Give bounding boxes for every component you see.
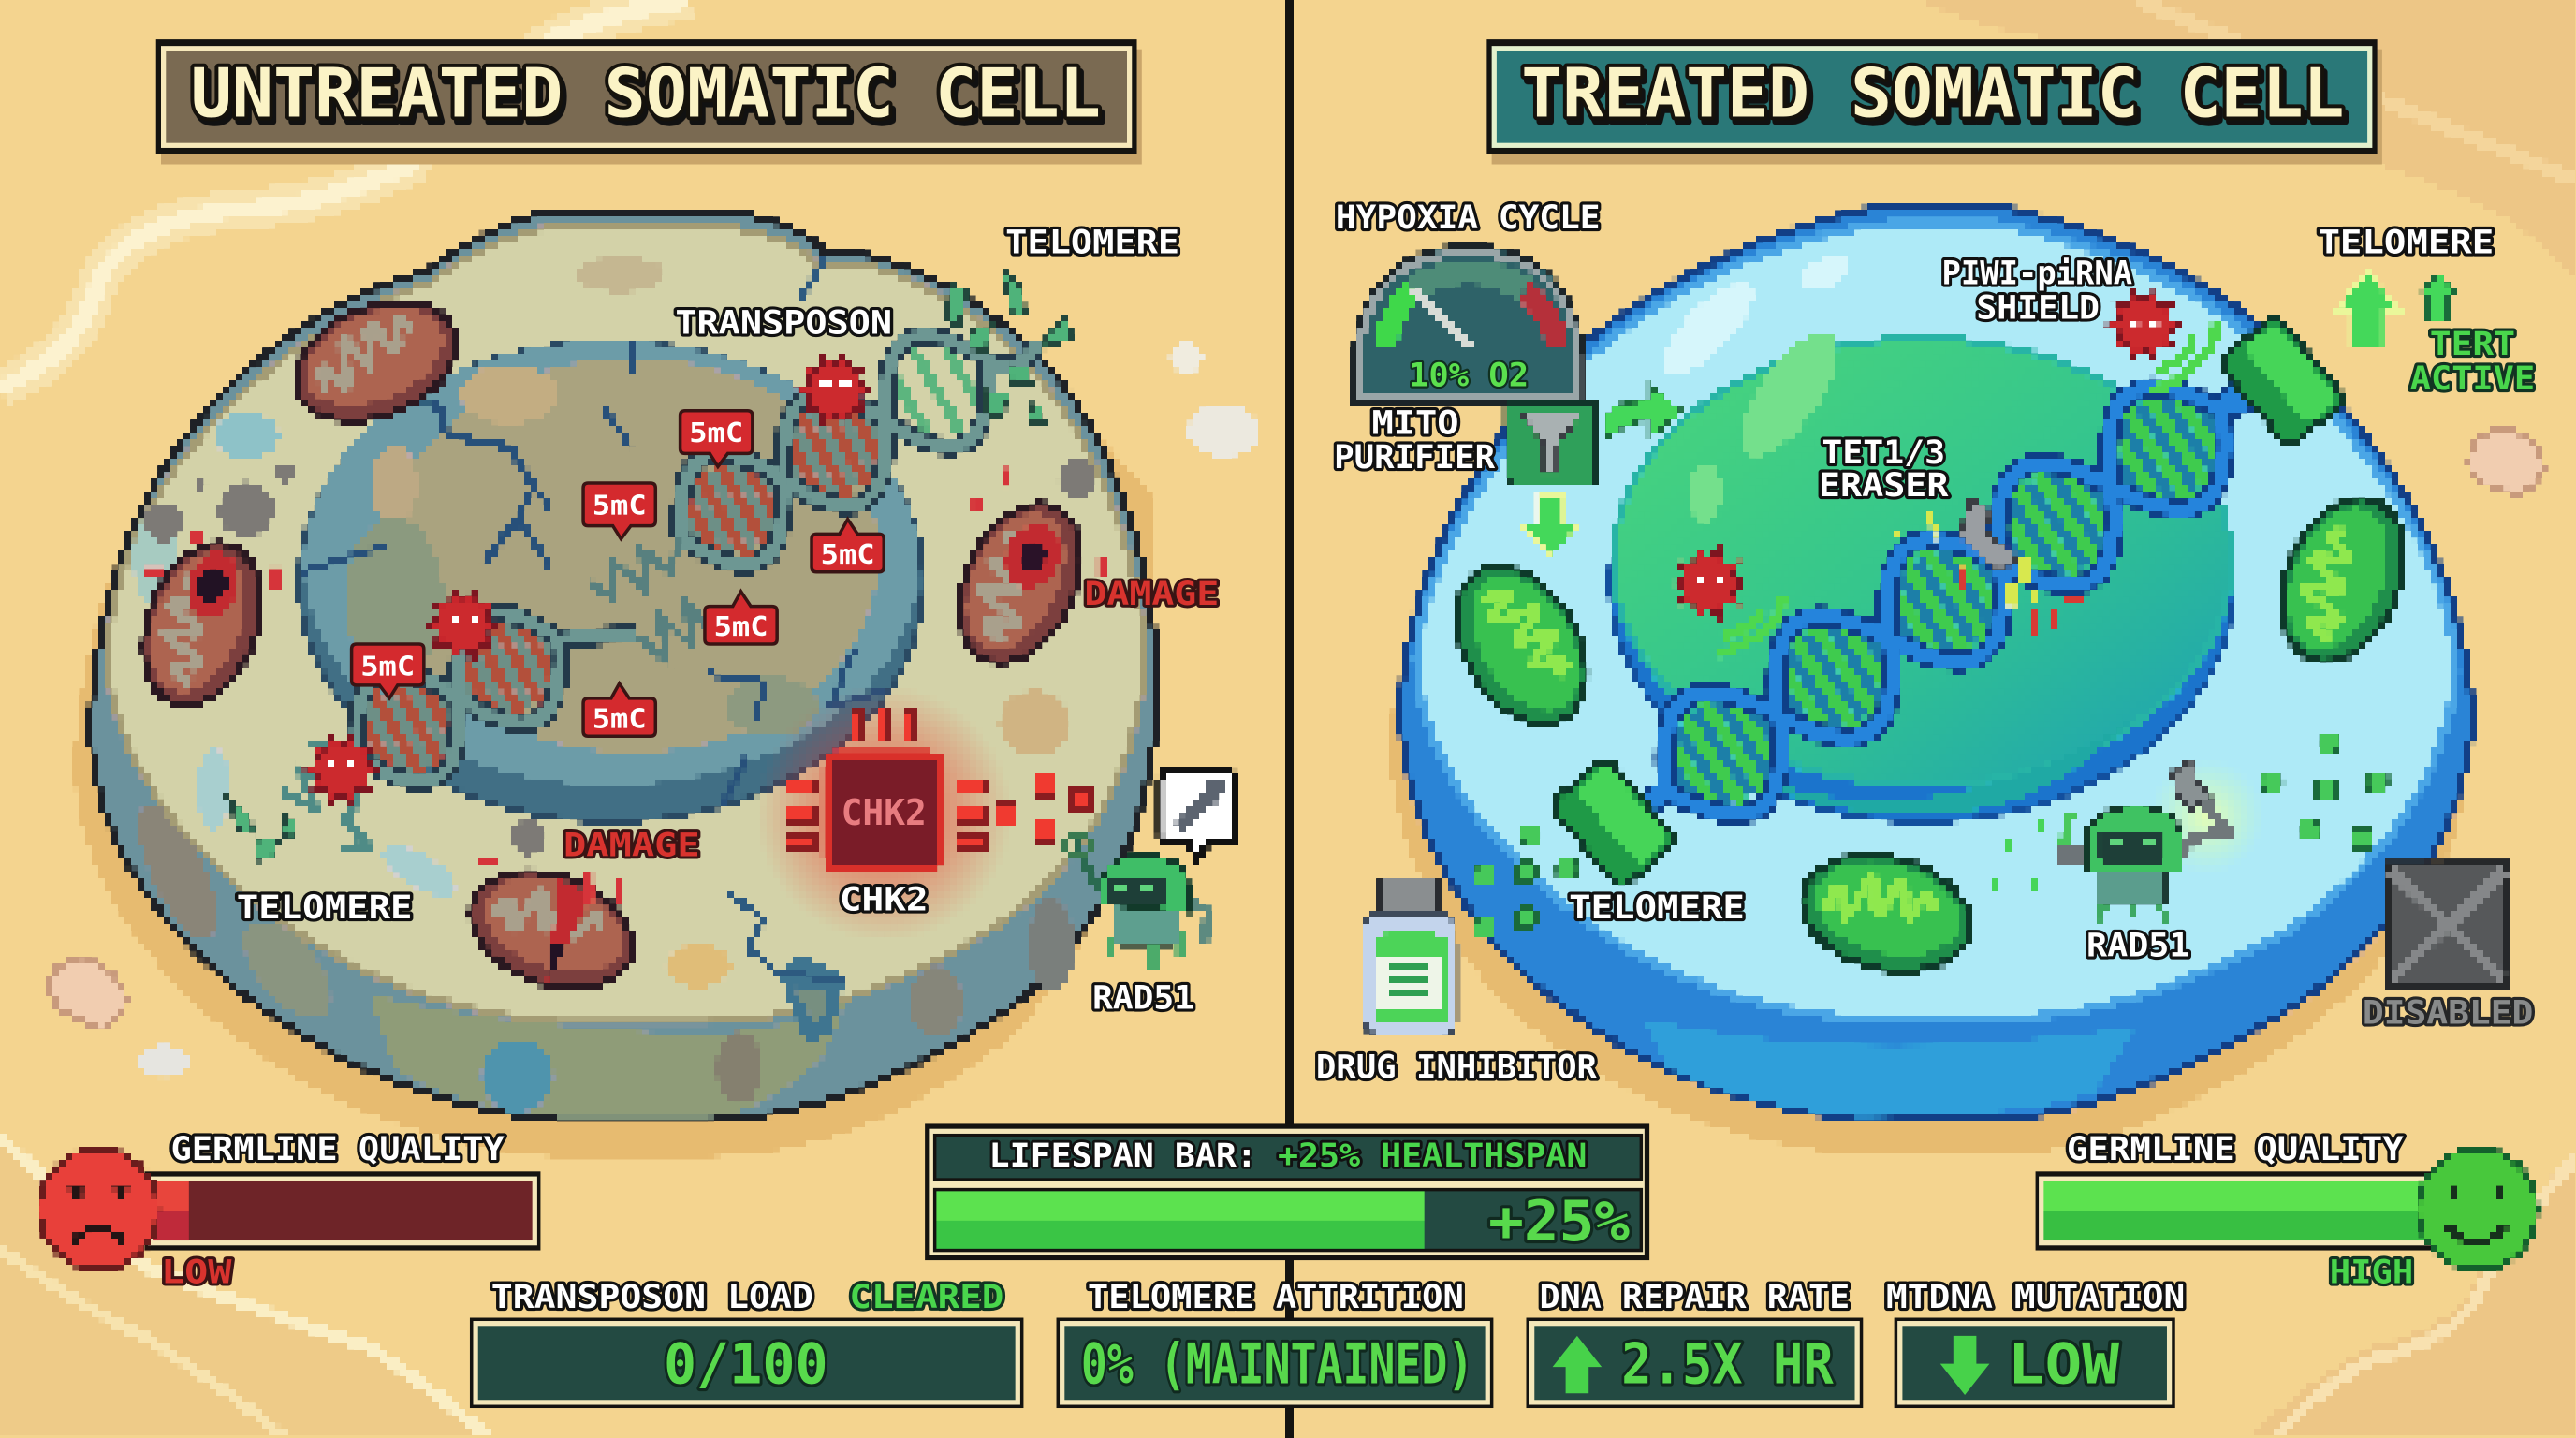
stat: DNA repair rate: 2.5X HR bbox=[1621, 1333, 1834, 1398]
5mC methylation tags: 5mC bbox=[593, 703, 647, 734]
cell shadow on sand bbox=[1388, 246, 2466, 1155]
label: TERT active: ACTIVE bbox=[2410, 360, 2535, 398]
label: hypoxia cycle: HYPOXIA CYCLE bbox=[1336, 198, 1600, 237]
lifespan heading: LIFESPAN BAR: +25% HEALTHSPAN bbox=[989, 1137, 1587, 1175]
shell bbox=[2469, 429, 2543, 496]
cell membrane cracks bbox=[726, 257, 846, 979]
label: telomere top: TELOMERE bbox=[1005, 223, 1179, 261]
label: telomere bottom: TELOMERE bbox=[1569, 888, 1745, 927]
lifespan bar bbox=[925, 1123, 1649, 1260]
label: mito purifier: PURIFIER bbox=[1334, 438, 1496, 477]
DNA double helix bbox=[1565, 321, 2309, 890]
telomere fragments bbox=[227, 271, 1071, 861]
mitochondrion right bbox=[2259, 480, 2426, 680]
stat: telomere attrition: TELOMERE ATTRITION bbox=[1088, 1278, 1464, 1316]
label: transposon: TRANSPOSON bbox=[675, 303, 892, 342]
telomerase particles bbox=[1475, 733, 2387, 938]
icon: telomere up arrows bbox=[2334, 271, 2458, 348]
cell top surface bbox=[107, 225, 1145, 1022]
germline quality untreated bbox=[39, 1130, 540, 1292]
label: CHK2: CHK2 bbox=[840, 880, 929, 918]
lifespan value: +25% bbox=[1488, 1190, 1630, 1255]
gauge reading: 10% O2 bbox=[1409, 356, 1529, 394]
5mC methylation tags: 5mC bbox=[821, 539, 875, 570]
label: telomere bottom: TELOMERE bbox=[237, 888, 413, 927]
stat: transposon load: CLEARED bbox=[849, 1278, 1003, 1316]
panel: untreated cell bbox=[50, 211, 1260, 1157]
telomere cap bottom bbox=[1548, 756, 1678, 890]
CHK2 chip text: CHK2 bbox=[842, 792, 927, 834]
cell body bbox=[1399, 205, 2472, 1119]
stat: DNA repair rate: DNA REPAIR RATE bbox=[1540, 1278, 1850, 1316]
bar bbox=[144, 1171, 540, 1251]
cell side patches bbox=[123, 793, 1075, 1117]
label: RAD51: RAD51 bbox=[1092, 979, 1194, 1018]
DNA fragment lower bbox=[256, 519, 720, 868]
neutralised viruses with shields bbox=[1673, 291, 2217, 653]
stat: transposon load: TRANSPOSON LOAD bbox=[491, 1278, 813, 1316]
label: damage right: DAMAGE bbox=[1084, 575, 1219, 613]
smoke and sparks bbox=[144, 460, 1105, 903]
label: PIWI-piRNA shield bbox=[1942, 255, 2132, 327]
centre divider bbox=[1285, 0, 1294, 1438]
nucleus bbox=[1610, 318, 2234, 822]
label: GERMLINE QUALITY bbox=[2067, 1130, 2404, 1168]
5mC methylation tags: 5mC bbox=[689, 418, 743, 448]
label: RAD51: RAD51 bbox=[2086, 926, 2190, 964]
stat: mtDNA mutation: LOW bbox=[2008, 1333, 2119, 1398]
label: GERMLINE QUALITY bbox=[171, 1130, 505, 1168]
label: mito purifier bbox=[1334, 404, 1496, 477]
label: TET1/3 eraser bbox=[1819, 433, 1949, 505]
label: TERT active bbox=[2410, 325, 2535, 398]
cell shadow on sand bbox=[74, 250, 1153, 1157]
panel: treated cell bbox=[1316, 198, 2543, 1155]
title: untreated: UNTREATED SOMATIC CELL bbox=[191, 54, 1101, 133]
label: PIWI-piRNA shield: SHIELD bbox=[1976, 288, 2100, 327]
gauge: hypoxia cycle bbox=[1354, 246, 1584, 403]
icon: sad face bbox=[39, 1149, 157, 1270]
title: treated bbox=[1486, 39, 2382, 165]
RAD51 robot active bbox=[1995, 759, 2264, 920]
germline quality treated bbox=[2036, 1130, 2537, 1292]
disabled CHK2 crate bbox=[2387, 864, 2509, 986]
stat: transposon load bbox=[470, 1278, 1023, 1408]
drug inhibitor bottle bbox=[1364, 877, 1456, 1035]
title: treated: TREATED SOMATIC CELL bbox=[1521, 54, 2345, 133]
CHK2 chip bbox=[755, 685, 1090, 942]
label: TERT active: TERT bbox=[2430, 325, 2515, 363]
bar bbox=[2036, 1171, 2438, 1251]
5mC methylation tags bbox=[352, 411, 884, 736]
mitochondrion healthy-ish bbox=[278, 280, 475, 443]
RAD51 robot weak bbox=[1066, 833, 1208, 973]
arrow: purifier to nucleus bbox=[1606, 385, 1682, 439]
5mC methylation tags: 5mC bbox=[593, 490, 647, 521]
mitochondrion damaged left bbox=[123, 527, 282, 722]
cell top surface bbox=[1416, 224, 2456, 1019]
stat: transposon load: 0/100 bbox=[664, 1333, 828, 1398]
mitochondrion left bbox=[1430, 544, 1613, 748]
label: damage bottom: DAMAGE bbox=[564, 826, 700, 864]
arrow: purifier down bbox=[1521, 494, 1579, 557]
label: telomere top: TELOMERE bbox=[2318, 223, 2494, 261]
stat: mtDNA mutation: MTDNA MUTATION bbox=[1886, 1278, 2185, 1316]
label: PIWI-piRNA shield: PIWI-piRNA bbox=[1942, 255, 2132, 293]
label: TET1/3 eraser: TET1/3 bbox=[1822, 433, 1945, 472]
cell lower front face bbox=[1643, 1019, 2136, 1117]
nuclear cracks bbox=[299, 342, 887, 805]
label: mito purifier: MITO bbox=[1372, 404, 1459, 442]
icon: happy face bbox=[2419, 1149, 2537, 1270]
icon: transposon viruses bbox=[305, 355, 871, 803]
stat: telomere attrition bbox=[1057, 1278, 1493, 1408]
TET1/3 eraser tool bbox=[1895, 496, 2083, 634]
speech bubble wrench bbox=[1160, 770, 1236, 861]
icon: mito purifier filter bbox=[1506, 403, 1597, 485]
5mC methylation tags: 5mC bbox=[714, 611, 768, 642]
mitochondrion bottom bbox=[1790, 839, 1983, 989]
telomere cap top bbox=[2217, 315, 2347, 448]
label: disabled: DISABLED bbox=[2363, 993, 2533, 1032]
stat: mtDNA mutation bbox=[1886, 1278, 2185, 1408]
stat: telomere attrition: 0% (MAINTAINED) bbox=[1081, 1333, 1473, 1398]
label: drug inhibitor: DRUG INHIBITOR bbox=[1316, 1048, 1598, 1086]
title: untreated bbox=[156, 39, 1142, 165]
label: LOW bbox=[161, 1254, 232, 1292]
pebbles and shells bbox=[50, 344, 1260, 1078]
mitochondrion damaged right bbox=[936, 484, 1105, 682]
stat: DNA repair rate bbox=[1526, 1278, 1863, 1408]
cell body side bbox=[91, 211, 1158, 1121]
DNA fragment upper bbox=[564, 284, 1063, 641]
mitochondrion damaged bottom bbox=[455, 850, 650, 1009]
5mC methylation tags: 5mC bbox=[360, 651, 415, 682]
label: HIGH bbox=[2330, 1254, 2413, 1292]
cytoplasm patches bbox=[133, 257, 1071, 1043]
nucleus bbox=[299, 342, 923, 821]
label: TET1/3 eraser: ERASER bbox=[1819, 466, 1949, 505]
cell highlights bbox=[1650, 247, 1855, 387]
